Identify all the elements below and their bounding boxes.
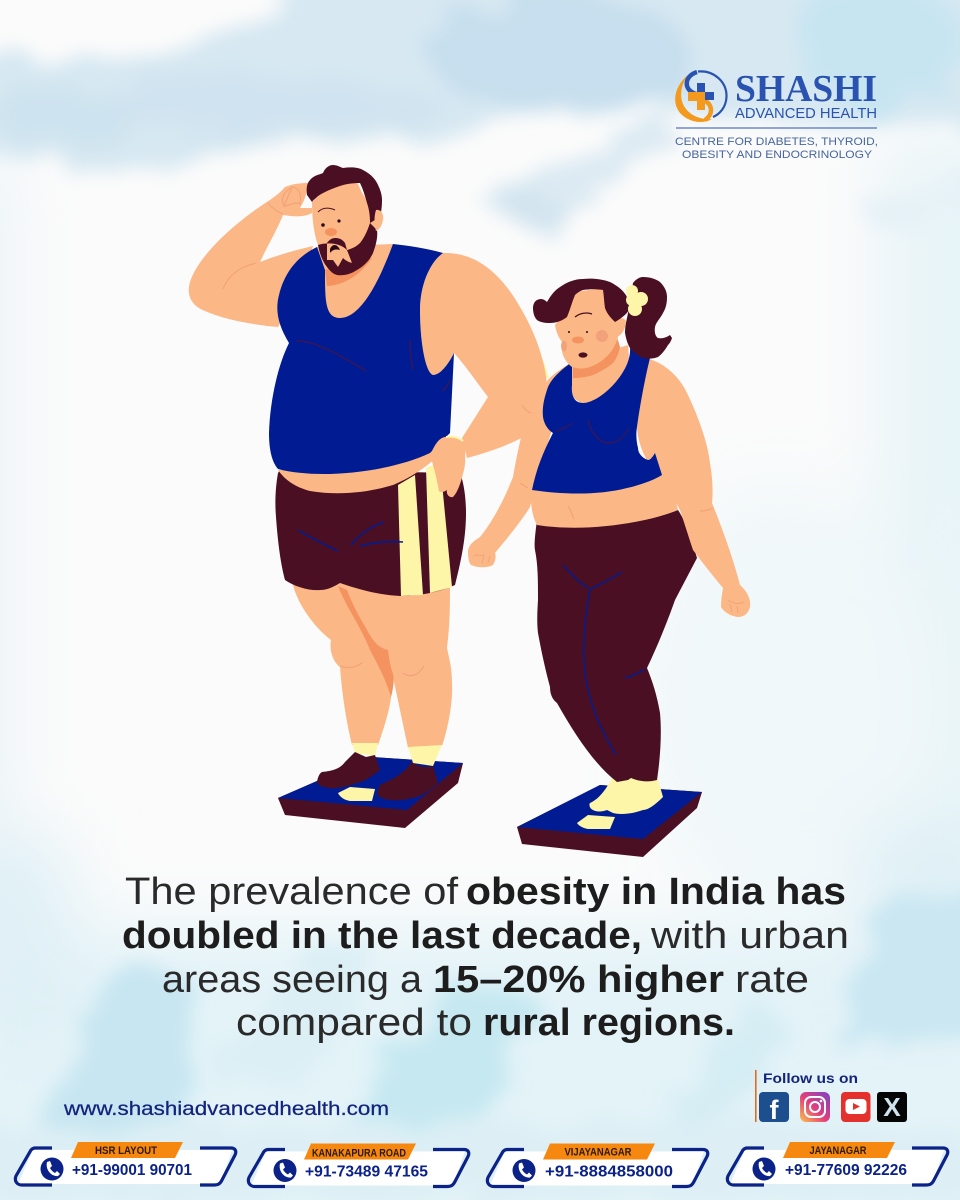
illustration: man on scale [189,165,549,828]
woman ear [614,318,626,337]
woman chest skin [570,345,630,405]
man beard [318,223,377,275]
bottom diagonal strokes [40,960,190,1130]
logo tagline [675,136,878,161]
icon: facebook: f [770,1095,780,1125]
man shoes [317,752,438,800]
woman ponytail [625,277,672,359]
woman belly [531,470,678,528]
contact: HSR Layout: +91-99001 90701 [72,1162,192,1179]
woman pants [535,510,697,782]
woman scale [517,785,702,857]
main statement text [122,871,849,1044]
man torso skin [278,244,437,493]
top blue band [0,0,960,172]
man ear [374,210,383,231]
logo tagline: OBESITY AND ENDOCRINOLOGY [682,149,873,161]
woman crop top [532,348,662,494]
line 4 [236,1002,735,1044]
illustration: woman on scale [468,277,750,857]
woman face details [561,313,608,358]
logo icon: ring and cross [675,71,727,122]
line 2: with urban [650,915,849,957]
line 1: The prevalence of [125,871,458,913]
contact: Vijayanagar: VIJAYANAGAR [564,1146,632,1158]
logo tagline: CENTRE FOR DIABETES, THYROID, [675,136,878,148]
line 3: 15–20% higher [433,959,724,1001]
contact: HSR Layout [15,1142,236,1185]
man right arm outline [440,252,549,378]
woman hair tie [626,285,648,316]
man neck shade [325,258,372,286]
website url: www.shashiadvancedhealth.com [63,1098,389,1120]
man legs [293,580,452,748]
contact: Jayanagar [727,1142,948,1185]
man face details [318,208,341,253]
contact: Vijayanagar [487,1144,708,1186]
contact: Kanakapura Road: +91-73489 47165 [305,1164,428,1180]
icon: instagram [800,1092,830,1122]
contact: Kanakapura Road: KANAKAPURA ROAD [312,1148,406,1160]
line 1 [125,871,846,913]
icon: youtube [841,1092,870,1122]
man scale [278,757,463,828]
woman hair [533,279,629,323]
man raised arm [189,183,313,327]
man tank top [269,244,454,474]
line 2: doubled in the last decade, [122,915,642,957]
line 3 [162,959,809,1001]
man face [312,182,375,263]
follow heading: Follow us on [763,1070,858,1086]
man hair [307,165,382,223]
icon: X: X [883,1092,901,1122]
man shorts [275,462,466,596]
line 3: rate [735,959,809,1001]
logo wordmark: SHASHI [735,68,877,110]
logo: Shashi Advanced Health [675,68,878,161]
line 4: rural regions. [483,1002,735,1044]
logo subtitle: ADVANCED HEALTH [735,105,877,122]
woman left arm [468,362,572,567]
woman feet [589,776,663,814]
woman face [555,288,618,368]
line 2 [122,915,849,957]
icon: facebook [759,1092,789,1125]
man right arm [420,253,547,458]
contact: Jayanagar: +91-77609 92226 [785,1162,907,1179]
woman right arm [637,358,750,617]
line 1: obesity in India has [466,871,846,913]
contact: Kanakapura Road [248,1144,469,1186]
contact: HSR Layout: HSR LAYOUT [95,1145,157,1157]
contact: Jayanagar: JAYANAGAR [810,1145,867,1157]
line 3: areas seeing a [162,959,423,1001]
contact: Vijayanagar: +91-8884858000 [545,1164,673,1180]
follow us block [755,1070,907,1125]
man socks [352,743,442,766]
woman fists [474,554,744,613]
woman neck shade [573,337,620,378]
man hand [430,437,465,497]
line 4: compared to [236,1002,472,1044]
icon: X [877,1092,907,1122]
